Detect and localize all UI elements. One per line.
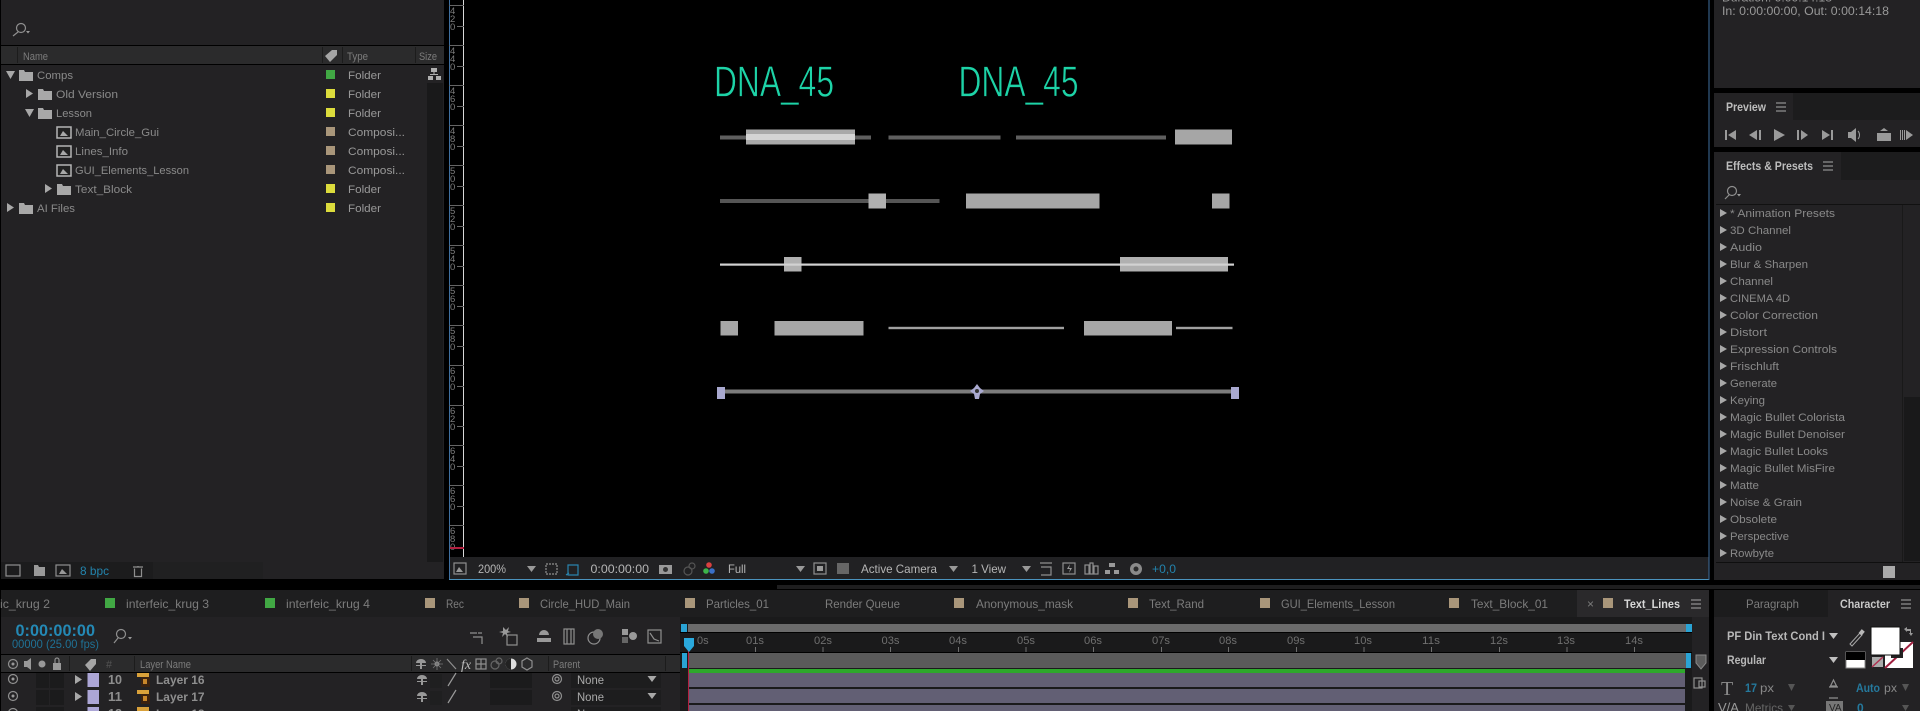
font style selector: Regular xyxy=(1727,653,1766,667)
vertical ruler xyxy=(449,0,464,579)
project item: Lines_Info: Lines_Info xyxy=(75,146,128,158)
icon: timeline search xyxy=(114,630,132,643)
effects list: Magic Bullet Denoiser xyxy=(1730,429,1845,441)
viewer toolbar: Full xyxy=(728,562,746,576)
vertical ruler: 640 xyxy=(450,446,455,473)
font size row: px xyxy=(1760,681,1774,695)
project item: Lesson xyxy=(25,108,381,120)
project item: Main_Circle_Gui: Composi... xyxy=(348,127,405,139)
viewer toolbar: 1 View xyxy=(972,562,1006,576)
panel: effects and presets xyxy=(1714,152,1920,580)
time ruler labels: 06s xyxy=(1084,635,1102,647)
time graph xyxy=(680,617,1692,711)
project item: Text_Block: Folder xyxy=(348,184,381,196)
project item: GUI_Elements_Lesson xyxy=(57,165,405,177)
project item: Main_Circle_Gui: Main_Circle_Gui xyxy=(75,127,159,139)
project item: Lesson: Lesson xyxy=(56,108,92,120)
time ruler labels: 10s xyxy=(1354,635,1372,647)
project item: Text_Block xyxy=(45,184,381,196)
font size row: Auto xyxy=(1856,681,1880,695)
effects list: Noise & Grain xyxy=(1730,497,1802,509)
project item: Lesson: Folder xyxy=(348,108,381,120)
project item: Old Version xyxy=(26,89,381,101)
time ruler labels: 14s xyxy=(1625,635,1643,647)
time ruler labels: 09s xyxy=(1287,635,1305,647)
viewer toolbar xyxy=(449,0,1710,580)
timecode: 0:00:00:00 xyxy=(16,621,95,640)
viewer toolbar: 0:00:00:00 xyxy=(590,562,649,576)
font family selector: PF Din Text Cond I xyxy=(1727,629,1825,643)
timeline tabs xyxy=(0,590,1709,617)
panel: preview: Preview xyxy=(1726,100,1767,114)
timeline side icons xyxy=(1694,655,1706,688)
vertical ruler: 580 xyxy=(450,326,455,353)
timecode xyxy=(12,621,99,651)
project item: Text_Block: Text_Block xyxy=(75,184,133,196)
project item: Comps: Folder xyxy=(348,70,381,82)
project item: AI Files: Folder xyxy=(348,203,381,215)
font size row xyxy=(1721,678,1909,700)
project item: Main_Circle_Gui xyxy=(57,127,405,139)
panel: preview xyxy=(1714,93,1920,147)
line row 1 xyxy=(720,130,1232,144)
title: DNA_45 right: DNA_45 xyxy=(958,59,1078,107)
layer row 10: 10 xyxy=(108,672,122,687)
title: DNA_45 left: DNA_45 xyxy=(714,59,834,107)
effects list: Channel xyxy=(1730,276,1773,288)
effects list: Matte xyxy=(1730,480,1759,492)
timeline tabs: Circle_HUD_Main xyxy=(540,597,630,611)
time ruler labels: 05s xyxy=(1017,635,1035,647)
effects list: Magic Bullet Colorista xyxy=(1730,412,1846,424)
panel: character: Paragraph xyxy=(1746,597,1799,611)
layer row 12 partial xyxy=(8,706,661,711)
effects list: CINEMA 4D xyxy=(1730,293,1790,305)
timeline tabs: interfeic_krug 3 xyxy=(126,597,209,611)
timeline tabs: GUI_Elements_Lesson xyxy=(1281,597,1395,611)
panel: info: In: 0:00:00:00, Out: 0:00:14:18 xyxy=(1722,6,1889,18)
project item: Comps xyxy=(6,70,381,82)
project item: Lines_Info xyxy=(57,146,405,158)
colour swatches xyxy=(1846,627,1913,668)
effects list: Rowbyte xyxy=(1730,548,1774,560)
time ruler labels: 04s xyxy=(949,635,967,647)
effects list: Keying xyxy=(1730,395,1765,407)
vertical ruler: 420 xyxy=(450,6,455,33)
effects list: Generate xyxy=(1730,378,1777,390)
timeline tabs: Text_Rand xyxy=(1149,597,1204,611)
effects list: Perspective xyxy=(1730,531,1789,543)
timecode: 00000 (25.00 fps) xyxy=(12,637,99,651)
vertical ruler: 460 xyxy=(450,86,455,113)
layer row 11: Layer 17 xyxy=(156,690,205,704)
line row 4 xyxy=(720,321,1232,336)
project item: Old Version: Old Version xyxy=(56,89,118,101)
project item: GUI_Elements_Lesson: Composi... xyxy=(348,165,405,177)
time ruler labels: 0s xyxy=(697,635,709,647)
composition viewer xyxy=(464,0,1709,557)
time ruler labels xyxy=(697,635,1643,652)
preview transport controls xyxy=(1725,128,1913,142)
vertical ruler: 660 xyxy=(450,486,455,513)
layer row 11: None xyxy=(577,690,604,704)
time ruler labels: 12s xyxy=(1490,635,1508,647)
timeline tabs: interfeic_krug 4 xyxy=(286,597,370,611)
project toolbar: 8 bpc xyxy=(80,564,109,578)
vertical ruler: 480 xyxy=(450,126,455,153)
project column header: Type xyxy=(347,51,368,63)
project item: Old Version: Folder xyxy=(348,89,381,101)
vertical ruler: 500 xyxy=(450,166,455,193)
vertical ruler: 520 xyxy=(450,206,455,233)
layer row 11 xyxy=(8,689,661,705)
project item: GUI_Elements_Lesson: GUI_Elements_Lesson xyxy=(75,165,189,177)
timeline switches xyxy=(470,627,661,645)
layer row 10: None xyxy=(577,673,604,687)
project column header xyxy=(1,45,444,65)
divider scrollbar xyxy=(777,585,1920,589)
effects list: Blur & Sharpen xyxy=(1730,259,1808,271)
effects list: Color Correction xyxy=(1730,310,1818,322)
time ruler labels: 08s xyxy=(1219,635,1237,647)
font size row: px xyxy=(1884,681,1897,695)
vertical ruler: 440 xyxy=(450,46,455,73)
timeline tabs: ic_krug 2 xyxy=(0,597,50,611)
timeline tabs: Anonymous_mask xyxy=(976,597,1074,611)
timeline tabs: Text_Lines xyxy=(1624,597,1680,611)
effects list: Magic Bullet MisFire xyxy=(1730,463,1835,475)
panel: timeline xyxy=(0,590,1709,711)
panel: character xyxy=(1714,590,1920,711)
time ruler labels: 07s xyxy=(1152,635,1170,647)
playhead xyxy=(684,638,694,711)
project item: AI Files: AI Files xyxy=(37,203,76,215)
effects list: Expression Controls xyxy=(1730,344,1838,356)
line row 2 xyxy=(720,194,1230,208)
timeline tabs: Particles_01 xyxy=(706,597,769,611)
panel: project xyxy=(1,0,444,579)
effects list: Audio xyxy=(1730,242,1762,254)
project item: Comps: Comps xyxy=(37,70,74,82)
kerning row xyxy=(1718,700,1909,711)
icon: eyedropper xyxy=(1850,629,1865,646)
viewer toolbar: Active Camera xyxy=(861,562,937,576)
timeline tabs: × xyxy=(1587,597,1594,611)
layer column header: fx xyxy=(461,658,472,673)
timeline tabs: Render Queue xyxy=(825,597,900,611)
panel: info xyxy=(1714,0,1920,88)
timeline tabs: Rec xyxy=(446,597,464,611)
font size row: T xyxy=(1721,678,1733,700)
project column header: Name xyxy=(23,51,48,63)
font size row: 17 xyxy=(1745,681,1757,695)
vertical ruler: 560 xyxy=(450,286,455,313)
time ruler labels: 02s xyxy=(814,635,832,647)
effects list xyxy=(1720,208,1846,560)
effects list: Obsolete xyxy=(1730,514,1777,526)
effects list: Frischluft xyxy=(1730,361,1779,373)
time ruler labels: 03s xyxy=(882,635,900,647)
icon: flowchart xyxy=(428,68,441,80)
icon: new folder xyxy=(1883,566,1895,578)
time ruler labels: 13s xyxy=(1557,635,1575,647)
line row 5 with handles xyxy=(717,384,1239,399)
icon: effects search xyxy=(1725,186,1741,199)
vertical ruler: 620 xyxy=(450,406,455,433)
project item: AI Files xyxy=(7,203,381,215)
timeline tabs: Text_Block_01 xyxy=(1471,597,1548,611)
project column header: Size xyxy=(419,51,437,63)
layer column header xyxy=(1,654,680,673)
layer row 10: Layer 16 xyxy=(156,673,205,687)
icon: project search xyxy=(13,24,30,36)
effects list: 3D Channel xyxy=(1730,225,1791,237)
project item: Lines_Info: Composi... xyxy=(348,146,405,158)
vertical ruler: 540 xyxy=(450,246,455,273)
vertical ruler: 680 xyxy=(450,526,455,553)
layer row 11: 11 xyxy=(108,689,122,704)
line row 3 xyxy=(720,257,1234,272)
layer column header: # xyxy=(106,659,113,671)
layer column header: Parent xyxy=(553,659,580,671)
viewer toolbar: 200% xyxy=(478,562,506,576)
time ruler labels: 11s xyxy=(1422,635,1441,647)
layer row 10 xyxy=(8,672,661,688)
vertical ruler: 600 xyxy=(450,366,455,393)
layer column header: Layer Name xyxy=(140,659,191,671)
project toolbar xyxy=(1,562,444,579)
viewer toolbar: +0,0 xyxy=(1152,562,1176,576)
effects list: * Animation Presets xyxy=(1730,208,1836,220)
time ruler labels: 01s xyxy=(746,635,764,647)
font style selector xyxy=(1727,653,1838,667)
panel: character: Character xyxy=(1840,597,1890,611)
effects list: Distort xyxy=(1730,327,1767,339)
panel: effects and presets: Effects & Presets xyxy=(1726,159,1813,173)
effects list: Magic Bullet Looks xyxy=(1730,446,1829,458)
